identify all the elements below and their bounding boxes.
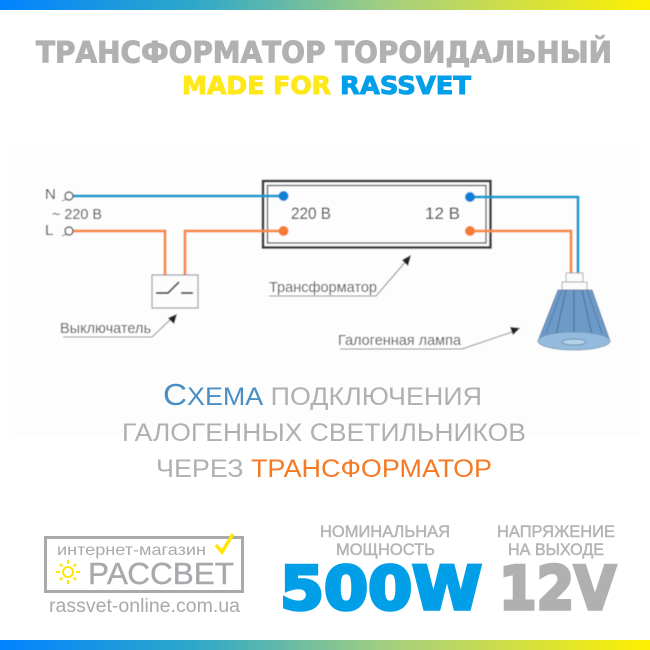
bottom gradient bar [0, 640, 650, 650]
icon: halogen lamp [538, 273, 610, 350]
power value: 500W [280, 554, 482, 624]
top gradient bar [0, 0, 650, 10]
panel: wiring diagram [10, 145, 640, 435]
title: ТРАНСФОРМАТОР ТОРОИДАЛЬНЫЙ [36, 36, 612, 70]
transformer label with arrow [269, 255, 411, 296]
input labels: N [45, 186, 56, 203]
caption [122, 377, 526, 483]
voltage label: НА ВЫХОДЕ [508, 540, 604, 559]
orange line wire [72, 231, 571, 275]
voltage label [497, 522, 615, 559]
logo name: РАССВЕТ [88, 556, 234, 591]
icon: sun [56, 560, 80, 584]
voltage value: 12V [499, 554, 617, 624]
transformer label with arrow: Трансформатор [269, 280, 377, 296]
spec: power [280, 522, 482, 624]
lamp label with arrow [338, 327, 520, 349]
blue neutral wire [72, 196, 578, 273]
logo small text: интернет-магазин [57, 542, 206, 559]
subtitle: MADE FOR [182, 71, 331, 100]
caption line 1: СХЕМА ПОДКЛЮЧЕНИЯ [163, 377, 482, 412]
website url: rassvet-online.com.ua [49, 596, 240, 617]
transformer voltage labels: 220 В [291, 204, 331, 223]
power label: НОМИНАЛЬНАЯ [320, 522, 450, 541]
switch label with arrow: Выключатель [60, 321, 151, 337]
transformer box [263, 181, 490, 248]
voltage label: НАПРЯЖЕНИЕ [497, 522, 615, 541]
caption line 3: ЧЕРЕЗ ТРАНСФОРМАТОР [156, 455, 492, 483]
input labels: ~ 220 В [52, 206, 102, 223]
switch label with arrow [60, 314, 177, 337]
power label: МОЩНОСТЬ [336, 540, 435, 559]
input labels [45, 186, 102, 239]
icon: check mark [216, 534, 233, 552]
subtitle: RASSVET [340, 71, 471, 100]
logo: rassvet [46, 534, 242, 617]
icon: switch [152, 275, 198, 308]
terminal dots [278, 191, 475, 236]
input labels: L [45, 222, 53, 239]
transformer voltage labels [291, 204, 460, 223]
input terminals [62, 192, 73, 236]
power label [320, 522, 450, 559]
spec: voltage [497, 522, 617, 624]
transformer voltage labels: 12 В [425, 204, 460, 223]
lamp label with arrow: Галогенная лампа [338, 333, 462, 349]
subtitle [182, 71, 471, 100]
caption line 2: ГАЛОГЕННЫХ СВЕТИЛЬНИКОВ [122, 419, 526, 447]
